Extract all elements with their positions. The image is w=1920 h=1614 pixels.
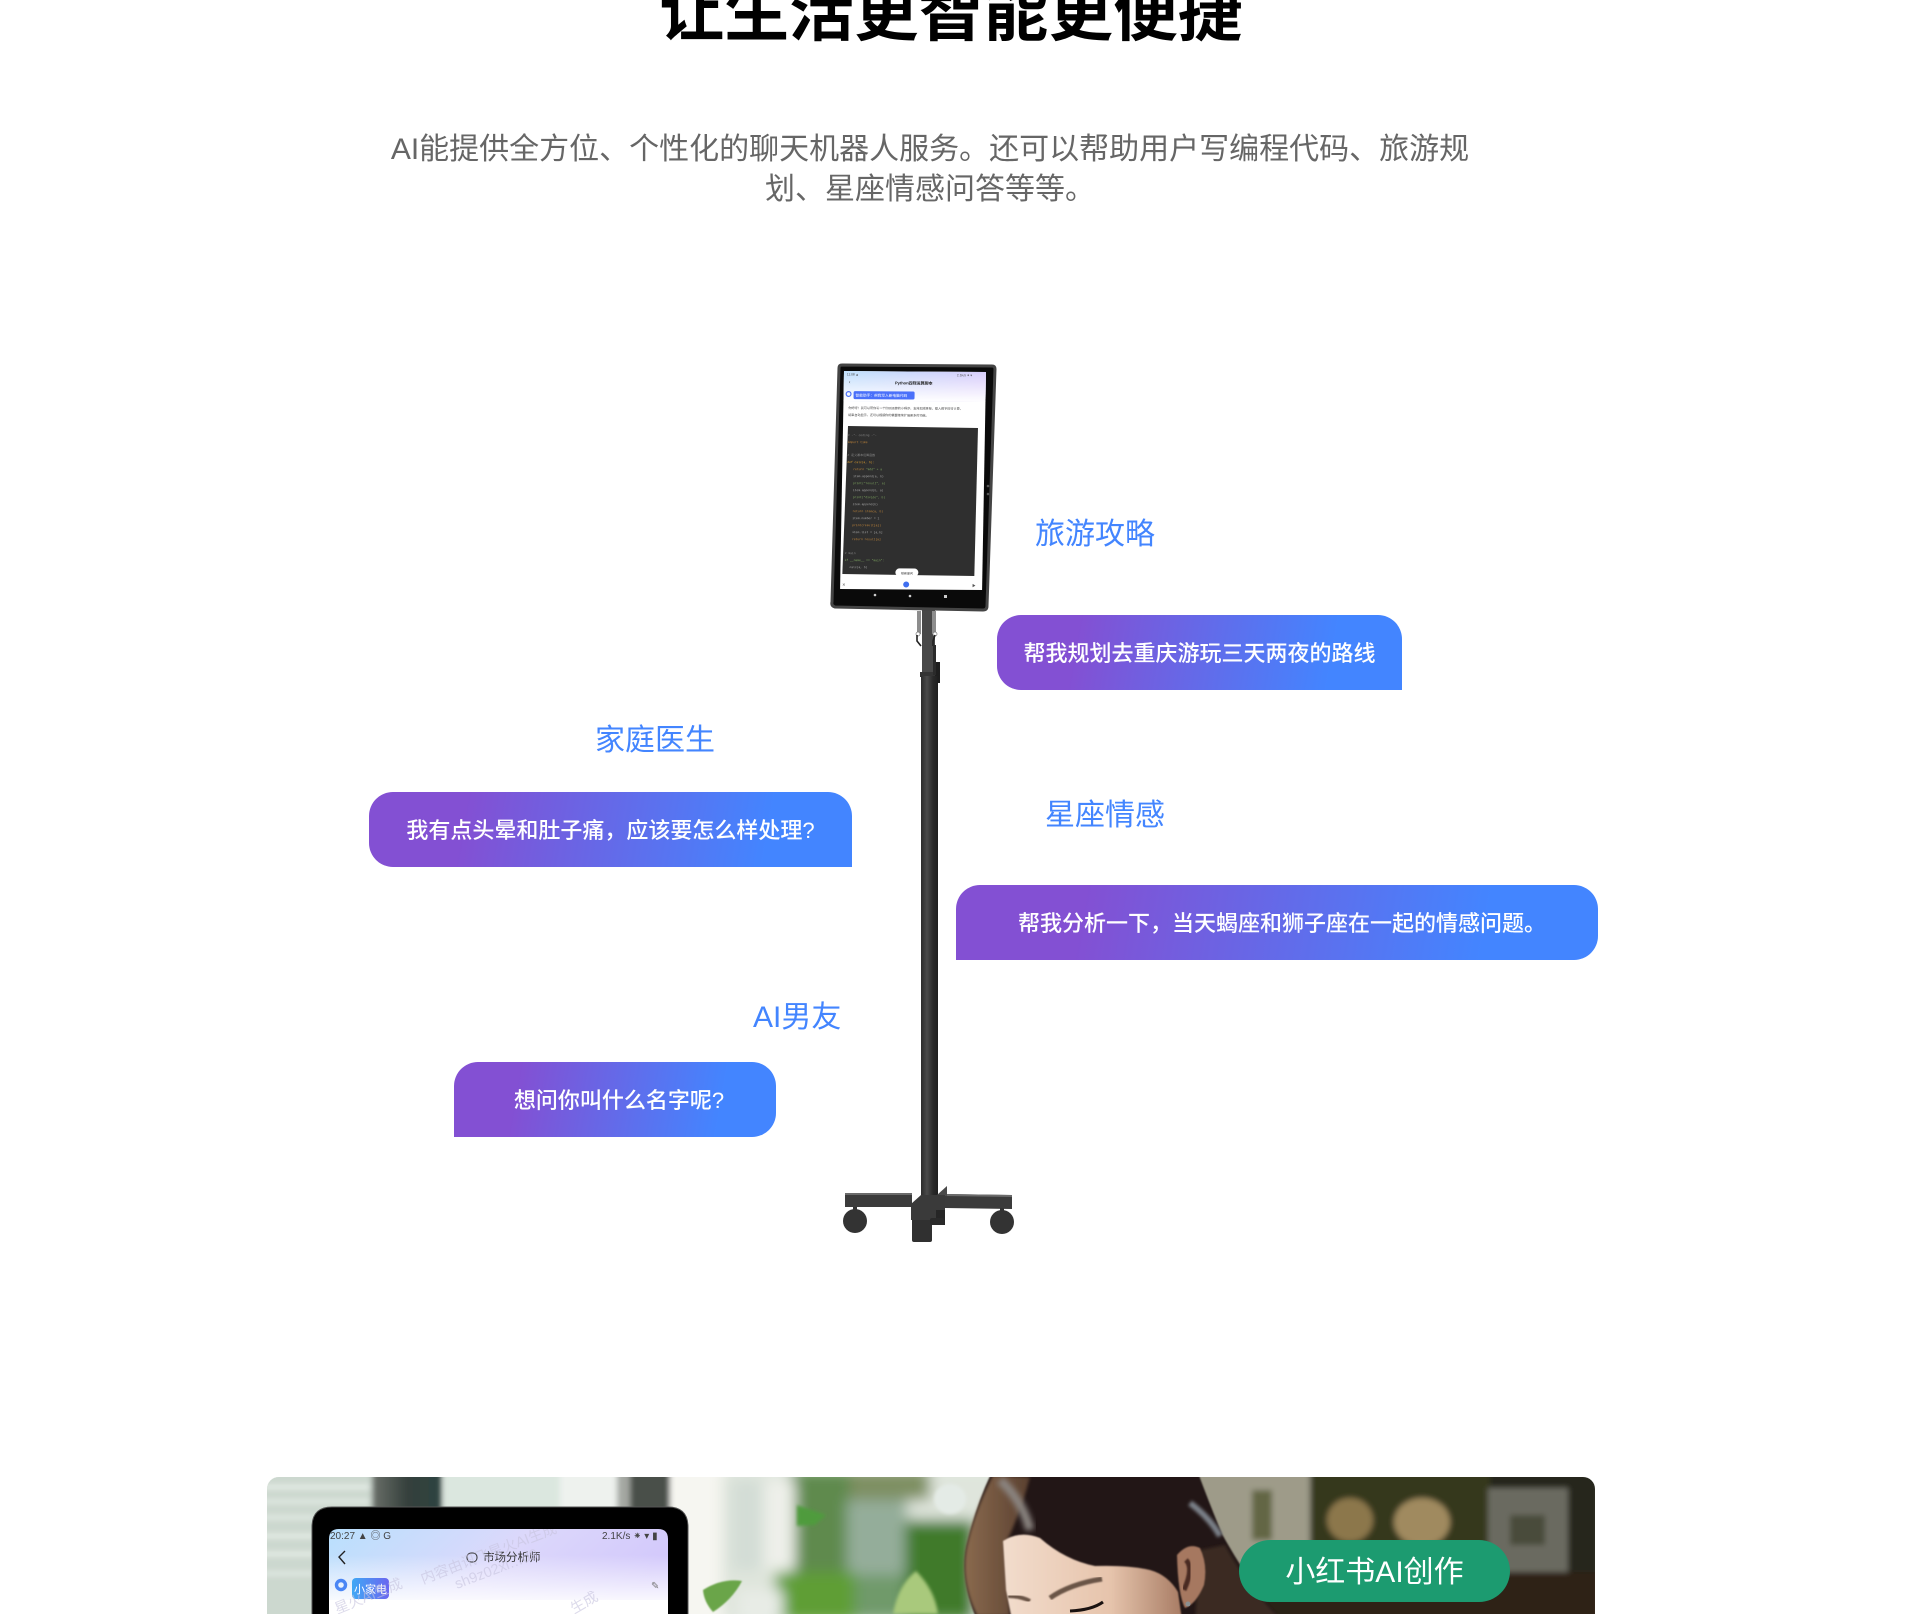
tablet screen: # main <box>845 551 856 555</box>
tablet screen: return item(a, b) <box>852 509 883 513</box>
tablet screen: 11:08 ▲ <box>847 373 859 377</box>
tablet screen contents: 市场分析师 <box>483 1550 540 1564</box>
panel: Xiaohongshu AI creation photo <box>267 1477 1595 1614</box>
tablet screen: import time <box>848 440 868 444</box>
tablet screen: def calc(a, b): <box>847 460 875 464</box>
label: family doctor: 家庭医生 <box>595 724 715 757</box>
tablet screen <box>840 371 986 590</box>
chat bubble: AI boyfriend <box>454 1062 776 1137</box>
badge: Xiaohongshu AI creation: 小红书AI创作 <box>1285 1556 1464 1589</box>
tablet screen: item.list = [a,b] <box>852 530 883 534</box>
tablet screen: 结果自动显示，还可以根据你的需要继续扩展更多的功能。 <box>848 412 929 418</box>
stand pole and clamp <box>916 608 940 1200</box>
tablet screen: 智能助手：帮我写入新电脑代码 <box>856 393 908 398</box>
tablet screen contents: sh9z02xl…d9 <box>453 1546 540 1593</box>
tablet screen: 继续提问 <box>901 570 913 576</box>
device: tablet on rolling stand <box>830 364 1014 1242</box>
chat bubble: doctor: 我有点头晕和肚子痛，应该要怎么样处理? <box>406 818 815 843</box>
tablet screen: print("result", a) <box>853 481 886 485</box>
tablet screen: return result[a] <box>852 537 881 541</box>
tablet screen: calc(a, b) <box>849 565 868 569</box>
label: astrology and emotion: 星座情感 <box>1045 799 1165 832</box>
tablet in photo <box>312 1507 688 1614</box>
tablet screen: print(result[a]) <box>852 523 881 527</box>
tablet screen: 2.1K/s ⁕ ▾ <box>957 373 972 377</box>
chat bubble: travel: 帮我规划去重庆游玩三天两夜的路线 <box>1023 641 1376 666</box>
tablet screen: if __name__ == "main": <box>845 558 884 562</box>
tablet screen contents: 2.1K/s ⁕ ▾ ▮ <box>602 1531 658 1542</box>
rolling base with wheels <box>843 1186 1014 1242</box>
subtitle text block <box>391 133 1469 206</box>
tablet screen contents: ✎ <box>651 1581 659 1592</box>
subtitle text block: AI能提供全方位、个性化的聊天机器人服务。还可以帮助用户写编程代码、旅游规 <box>391 133 1469 166</box>
tablet body <box>832 365 995 610</box>
chat bubble: astrology: 帮我分析一下，当天蝎座和狮子座在一起的情感问题。 <box>1018 911 1546 936</box>
tablet screen contents: 内容由讯飞星火AI生成 <box>418 1520 559 1588</box>
tablet screen: item.append(a, b) <box>853 474 884 478</box>
chat bubble: AI boyfriend: 想问你叫什么名字呢? <box>514 1088 724 1113</box>
chat bubble: astrology <box>956 885 1598 960</box>
tablet screen: Python四则运算脚本 <box>895 379 933 386</box>
tablet screen: # -*- coding -*- <box>848 433 877 437</box>
woman: hair, face, ear <box>965 1470 1282 1614</box>
tablet screen: item.number = 1 <box>852 516 880 520</box>
tablet screen: item.append(b) <box>853 502 878 506</box>
tablet screen: 你好呀！我可以帮你写一个四则运算的小程序，支持加减乘除，输入数字即可计算， <box>848 405 963 411</box>
chat bubble: travel <box>997 615 1402 690</box>
label: travel guide: 旅游攻略 <box>1035 518 1155 551</box>
tablet screen contents <box>329 1520 668 1614</box>
tablet screen: ‹ <box>849 380 851 386</box>
tablet screen: ✕ <box>842 582 846 587</box>
tablet screen: return "add" + a <box>853 467 882 471</box>
tablet screen contents: 小家电 <box>354 1582 387 1596</box>
subtitle text block: 划、星座情感问答等等。 <box>765 173 1095 206</box>
badge: Xiaohongshu AI creation <box>1239 1540 1510 1602</box>
navigation dots on tablet bar <box>874 594 947 598</box>
tablet screen: item.append(b, a) <box>853 488 884 492</box>
tablet screen: # 定义基本运算函数 <box>847 452 875 457</box>
tablet screen: print("divide", b) <box>853 495 885 499</box>
label: AI boyfriend: AI男友 <box>753 1001 841 1034</box>
photo background <box>260 1470 1600 1614</box>
tablet screen contents: 20:27 ▲ ◎ G <box>330 1530 391 1542</box>
chat bubble: doctor <box>369 792 852 867</box>
tablet screen: ▶ <box>972 583 976 588</box>
